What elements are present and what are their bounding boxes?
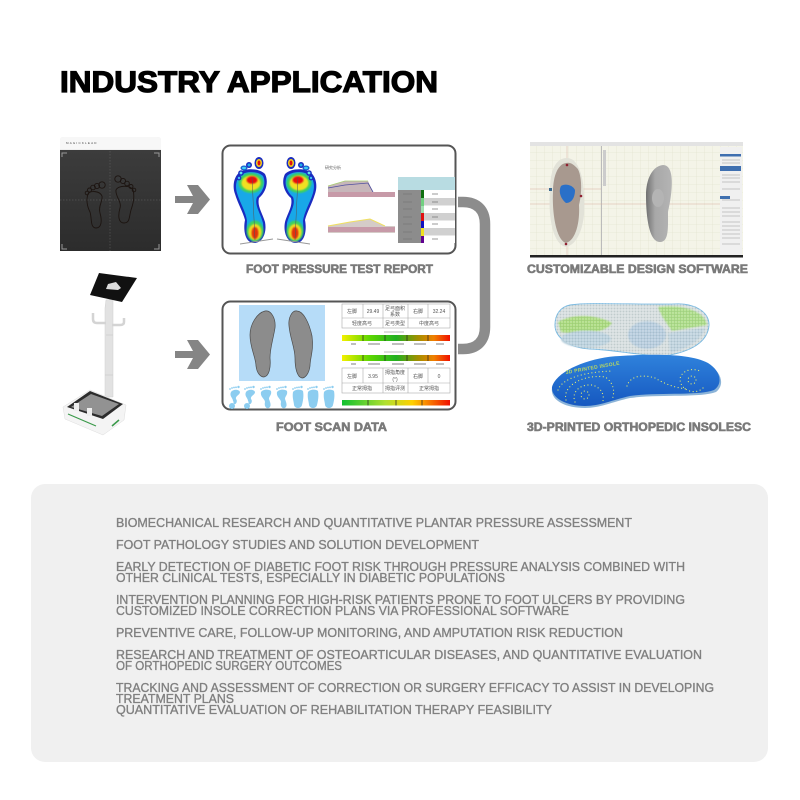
chart: pressure curves — [325, 164, 395, 233]
text: intervention planning: INTERVENTION PLANNING FOR HIGH-RISK PATIENTS PRONE TO FOOT ULCERS BY PROVIDING — [116, 592, 685, 607]
text: correction tracking — [116, 680, 714, 706]
device: pressure plate — [60, 137, 161, 251]
connector: reports to design software — [458, 202, 485, 349]
text: correction tracking: TREATMENT PLANS — [116, 691, 234, 706]
text: intervention planning — [116, 592, 685, 618]
image: 3D-printed insoles — [552, 304, 721, 408]
label: foot scan data: FOOT SCAN DATA — [276, 422, 387, 434]
label: customizable design software: CUSTOMIZABLE DESIGN SOFTWARE — [527, 264, 748, 276]
heat map: left foot — [234, 157, 273, 244]
design: insole model — [646, 165, 672, 242]
text: osteoarticular research — [116, 647, 702, 673]
text: osteoarticular research: OF ORTHOPEDIC SURGERY OUTCOMES — [116, 658, 342, 673]
arrow: scanner to scan data — [175, 340, 210, 369]
text: biomechanical research: BIOMECHANICAL RESEARCH AND QUANTITATIVE PLANTAR PRESSURE ASSESSMENT — [116, 515, 632, 530]
table: arch index: 32.24 — [433, 309, 445, 315]
design: foot model — [550, 158, 584, 247]
text: intervention planning: CUSTOMIZED INSOLE CORRECTION PLANS VIA PROFESSIONAL SOFTWARE — [116, 603, 569, 618]
heat map: right foot — [277, 157, 316, 244]
table: arch index: 轻度高弓 — [352, 320, 372, 327]
device: foot scanner stand — [63, 273, 137, 435]
table: arch index: 中度高弓 — [419, 320, 439, 327]
table: arch index: 拇指评测 — [385, 385, 405, 392]
text: correction tracking: TRACKING AND ASSESSMENT OF CORRECTION OR SURGERY EFFICACY TO ASSIST IN DEVELOPING — [116, 680, 714, 695]
table: arch index: 右脚 — [413, 373, 423, 380]
table: arch index: 拇指角度 — [385, 369, 405, 376]
table: arch index: 3.95 — [368, 374, 378, 380]
text: rehabilitation evaluation: QUANTITATIVE EVALUATION OF REHABILITATION THERAPY FEASIBILITY — [116, 702, 552, 717]
title: INDUSTRY APPLICATION — [60, 66, 438, 99]
table: arch index: 正常拇指 — [352, 385, 372, 392]
image: customizable design software — [530, 142, 743, 258]
chart: pressure curves: 研究分析 — [325, 164, 341, 170]
table: arch index: 足弓类型 — [385, 320, 405, 327]
arrow: plate to report — [175, 185, 210, 214]
text: preventive care: PREVENTIVE CARE, FOLLOW-UP MONITORING, AND AMPUTATION RISK REDUCTION — [116, 625, 623, 640]
table: arch index: 正常拇指 — [419, 385, 439, 392]
table: arch index: 左脚 — [347, 308, 357, 315]
table: arch index: 0 — [438, 374, 441, 380]
panel: application list — [31, 484, 768, 762]
panel: foot pressure test report — [222, 146, 456, 254]
table: arch index: 右脚 — [413, 308, 423, 315]
text: foot pathology: FOOT PATHOLOGY STUDIES AND SOLUTION DEVELOPMENT — [116, 537, 479, 552]
text: early detection — [116, 559, 685, 585]
table: arch index: (°) — [392, 377, 398, 383]
scan image: foot soles — [239, 305, 325, 381]
text: osteoarticular research: RESEARCH AND TREATMENT OF OSTEOARTICULAR DISEASES, AND QUANTITATIVE EVALUATION — [116, 647, 702, 662]
label: 3D-printed orthopedic insoles: 3D-PRINTED ORTHOPEDIC INSOLESC — [527, 422, 751, 434]
insole: lattice underside — [555, 304, 709, 356]
table: arch index: 足弓面积 — [385, 305, 405, 312]
insole: blue printed top — [552, 355, 721, 408]
insole: blue printed top: 3D PRINTED INSOLE — [565, 360, 621, 376]
panel: foot scan data — [222, 302, 456, 410]
gauges: colour scales — [342, 332, 450, 406]
table: arch index: 系数 — [390, 311, 400, 318]
icons: foot arch types — [229, 386, 334, 409]
text: early detection: OTHER CLINICAL TESTS, ESPECIALLY IN DIABETIC POPULATIONS — [116, 570, 505, 585]
table: arch index — [342, 304, 450, 393]
label: foot pressure test report: FOOT PRESSURE TEST REPORT — [246, 264, 433, 276]
table: pressure summary — [398, 177, 455, 243]
table: arch index: 左脚 — [347, 373, 357, 380]
text: early detection: EARLY DETECTION OF DIABETIC FOOT RISK THROUGH PRESSURE ANALYSIS COMBINED WITH — [116, 559, 685, 574]
table: arch index: 29.49 — [367, 309, 379, 315]
device: pressure plate: MAGICKLEAD — [66, 141, 98, 145]
